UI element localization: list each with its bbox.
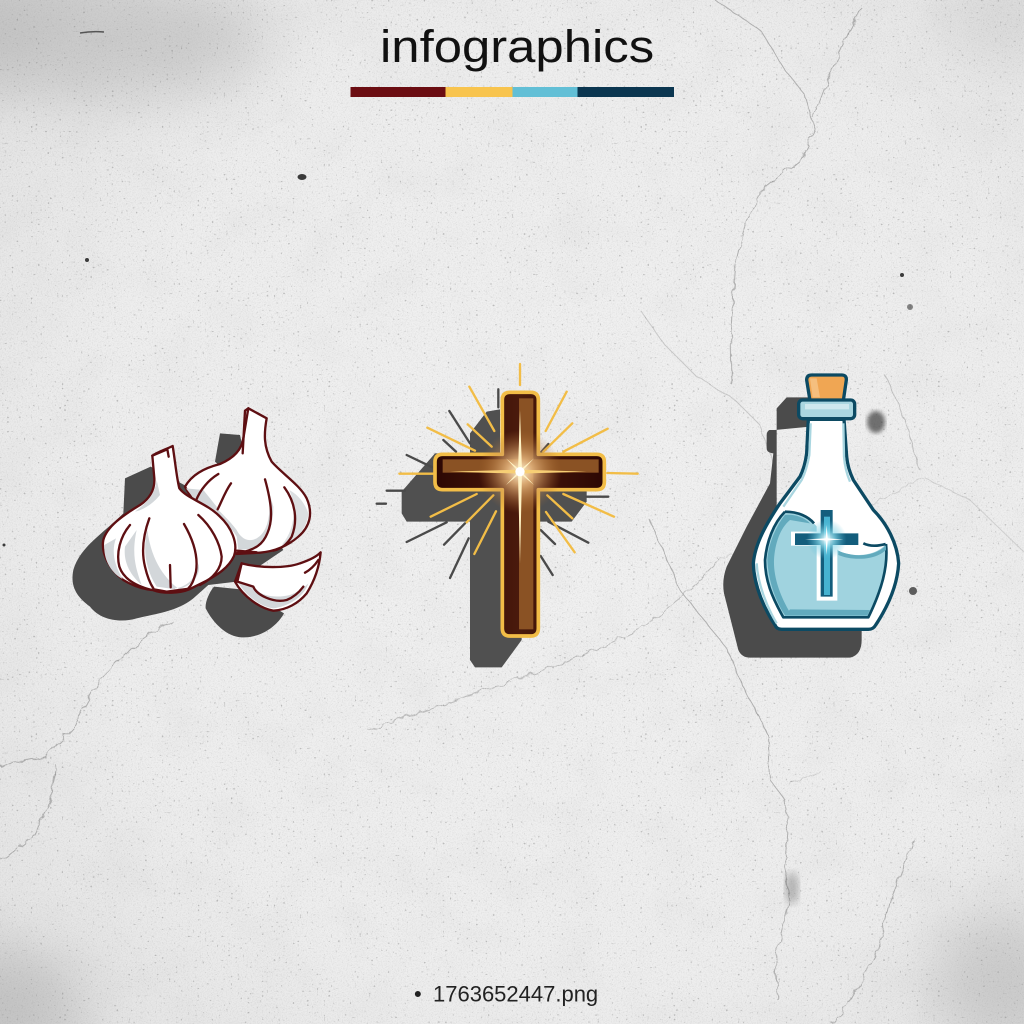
footer filename caption: 1763652447.png bbox=[433, 982, 598, 1006]
icon: garlic bbox=[72, 408, 321, 637]
footer filename caption: • bbox=[414, 982, 422, 1006]
icon: glowing cross bbox=[377, 364, 638, 667]
title colour bar bbox=[350, 87, 674, 97]
title: infographics bbox=[380, 23, 654, 72]
icon: holy water bottle bbox=[723, 375, 899, 658]
